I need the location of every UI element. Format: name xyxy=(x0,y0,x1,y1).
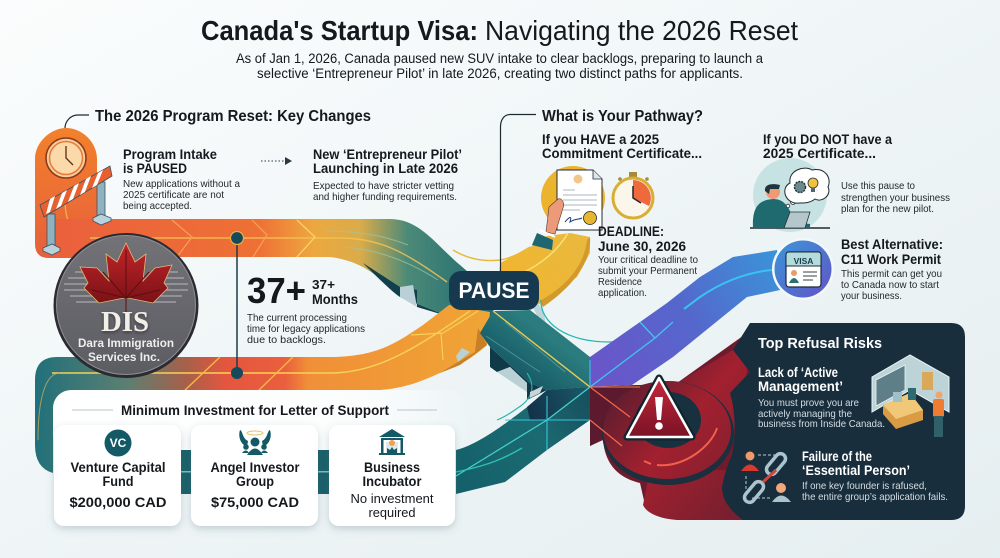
text: failure of the essential person: Failure of the xyxy=(802,449,872,464)
subtitle: selective ‘Entrepreneur Pilot’ in late 2026, creating two distinct paths for applicants. xyxy=(257,66,743,81)
text: failure of the essential person: the entire group’s application fails. xyxy=(802,492,948,503)
text: best alternative: C11 Work Permit xyxy=(841,251,941,267)
connector to Key Changes heading xyxy=(65,115,89,128)
stat: 37+ months: Months xyxy=(312,291,358,307)
text: failure of the essential person xyxy=(802,449,948,503)
stat: 37+ months xyxy=(247,270,365,346)
text: program intake paused: is PAUSED xyxy=(123,161,187,176)
card: business incubator: required xyxy=(368,505,416,520)
text: failure of the essential person: If one key founder is rafused, xyxy=(802,481,927,492)
title: Navigating the 2026 Reset xyxy=(485,15,798,46)
text: have a certificate xyxy=(542,132,702,161)
connector to Pathway heading xyxy=(500,114,536,272)
logo: Dara Immigration Services: Dara Immigration xyxy=(78,336,174,350)
text: deadline: DEADLINE: xyxy=(598,223,664,239)
icon: stopwatch xyxy=(613,172,653,218)
label: pause: PAUSE xyxy=(458,278,530,303)
road: purple path to visa xyxy=(590,250,780,387)
card: business incubator xyxy=(329,425,455,526)
text: use this pause: strengthen your business xyxy=(841,193,950,204)
text: use this pause xyxy=(841,181,950,215)
stat: 37+ months: due to backlogs. xyxy=(247,335,326,346)
icon: visa card: VISA xyxy=(794,256,813,266)
road: red swirl into refusal panel xyxy=(590,333,800,520)
text: lack of active management: actively managing the xyxy=(758,409,852,420)
icon: incubator building xyxy=(379,429,405,455)
text: program intake paused xyxy=(123,147,240,212)
text: program intake paused: 2025 certificate are not xyxy=(123,190,224,201)
timeline marker xyxy=(230,232,244,379)
card: business incubator: Incubator xyxy=(362,474,422,489)
logo: Dara Immigration Services xyxy=(54,233,198,378)
road strips between cards xyxy=(175,448,522,494)
heading: minimum investment: Minimum Investment for Letter of Support xyxy=(121,403,389,418)
road: lower orange path xyxy=(35,305,490,473)
text: lack of active management: business from Inside Canada. xyxy=(758,419,885,430)
text: new entrepreneur pilot: New ‘Entrepreneur Pilot’ xyxy=(313,147,462,162)
stat: 37+ months: 37+ xyxy=(247,270,306,311)
heading: key changes: The 2026 Program Reset: Key Changes xyxy=(95,108,371,125)
title xyxy=(201,15,798,46)
card: angel investor xyxy=(191,425,318,526)
heading: what is your pathway: What is Your Pathway? xyxy=(542,108,703,125)
text: lack of active management xyxy=(758,365,885,430)
card: venture capital: VC xyxy=(110,436,127,450)
text: best alternative: your business. xyxy=(841,291,902,302)
panel: minimum investment backdrop xyxy=(53,390,465,452)
subtitle: As of Jan 1, 2026, Canada paused new SUV intake to clear backlogs, preparing to launch a xyxy=(236,51,763,66)
icon: broken chain and people xyxy=(741,452,791,504)
text: lack of active management: Management’ xyxy=(758,379,843,394)
card: angel investor: Angel Investor xyxy=(210,460,300,475)
text: deadline: Residence xyxy=(598,277,642,288)
icon: visa card xyxy=(772,238,834,300)
card: business incubator: No investment xyxy=(350,491,434,506)
label: pause xyxy=(449,271,539,310)
text: program intake paused: New applications without a xyxy=(123,179,240,190)
text: do not have a certificate: 2025 Certificate... xyxy=(763,146,876,161)
text: best alternative: to Canada now to start xyxy=(841,280,939,291)
text: best alternative xyxy=(841,236,943,302)
arrow: paused to pilot xyxy=(261,157,292,165)
text: lack of active management: You must prove you are xyxy=(758,398,859,409)
text: deadline: submit your Permanent xyxy=(598,266,697,277)
text: best alternative: This permit can get you xyxy=(841,269,942,280)
text: deadline: application. xyxy=(598,288,647,299)
subtitle xyxy=(236,51,763,81)
icon: road barrier xyxy=(40,166,112,255)
heading: top refusal risks: Top Refusal Risks xyxy=(758,335,882,352)
icon: person thinking at laptop xyxy=(750,158,830,232)
logo: Dara Immigration Services: DIS xyxy=(101,306,149,338)
icon: warning triangle xyxy=(627,378,692,437)
title: Canada's Startup Visa: xyxy=(201,15,478,46)
card: angel investor: Group xyxy=(236,474,274,489)
text: have a certificate: If you HAVE a 2025 xyxy=(542,132,659,147)
card: venture capital: Fund xyxy=(102,474,134,489)
text: have a certificate: Commitment Certificate... xyxy=(542,146,702,161)
panel: top refusal risks xyxy=(722,323,965,520)
text: new entrepreneur pilot: and higher funding requirements. xyxy=(313,192,457,203)
text: deadline: June 30, 2026 xyxy=(598,238,686,254)
icon: angel group xyxy=(239,430,271,455)
text: program intake paused: Program Intake xyxy=(123,147,217,162)
text: best alternative: Best Alternative: xyxy=(841,236,943,252)
text: use this pause: Use this pause to xyxy=(841,181,915,192)
card: venture capital: Venture Capital xyxy=(70,460,166,475)
road: central teal junction xyxy=(456,300,660,494)
text: new entrepreneur pilot: Launching in Late 2026 xyxy=(313,161,458,176)
text: do not have a certificate: If you DO NOT have a xyxy=(763,132,892,147)
text: failure of the essential person: ‘Essential Person’ xyxy=(802,463,910,478)
road: yellow path to certificate xyxy=(498,233,590,322)
icon: clock xyxy=(46,138,86,178)
card: venture capital xyxy=(54,425,181,526)
text: program intake paused: being accepted. xyxy=(123,201,192,212)
text: new entrepreneur pilot: Expected to have stricter vetting xyxy=(313,181,454,192)
stat: 37+ months: The current processing xyxy=(247,313,347,324)
text: deadline xyxy=(598,223,698,299)
stat: 37+ months: time for legacy applications xyxy=(247,324,365,335)
text: deadline: Your critical deadline to xyxy=(598,255,698,266)
card: angel investor: $75,000 CAD xyxy=(211,494,299,510)
stat: 37+ months: 37+ xyxy=(312,278,335,292)
text: do not have a certificate xyxy=(763,132,892,161)
icon: office with person xyxy=(872,355,949,437)
road: upper path from pause barrier to centre xyxy=(35,128,530,333)
card: business incubator: Business xyxy=(364,460,420,475)
card: venture capital: $200,000 CAD xyxy=(70,494,166,510)
logo: Dara Immigration Services: Services Inc. xyxy=(88,350,160,364)
icon: certificate in hand xyxy=(532,166,605,250)
text: use this pause: plan for the new pilot. xyxy=(841,204,934,215)
text: lack of active management: Lack of ‘Active xyxy=(758,365,838,380)
text: new entrepreneur pilot xyxy=(313,147,462,203)
